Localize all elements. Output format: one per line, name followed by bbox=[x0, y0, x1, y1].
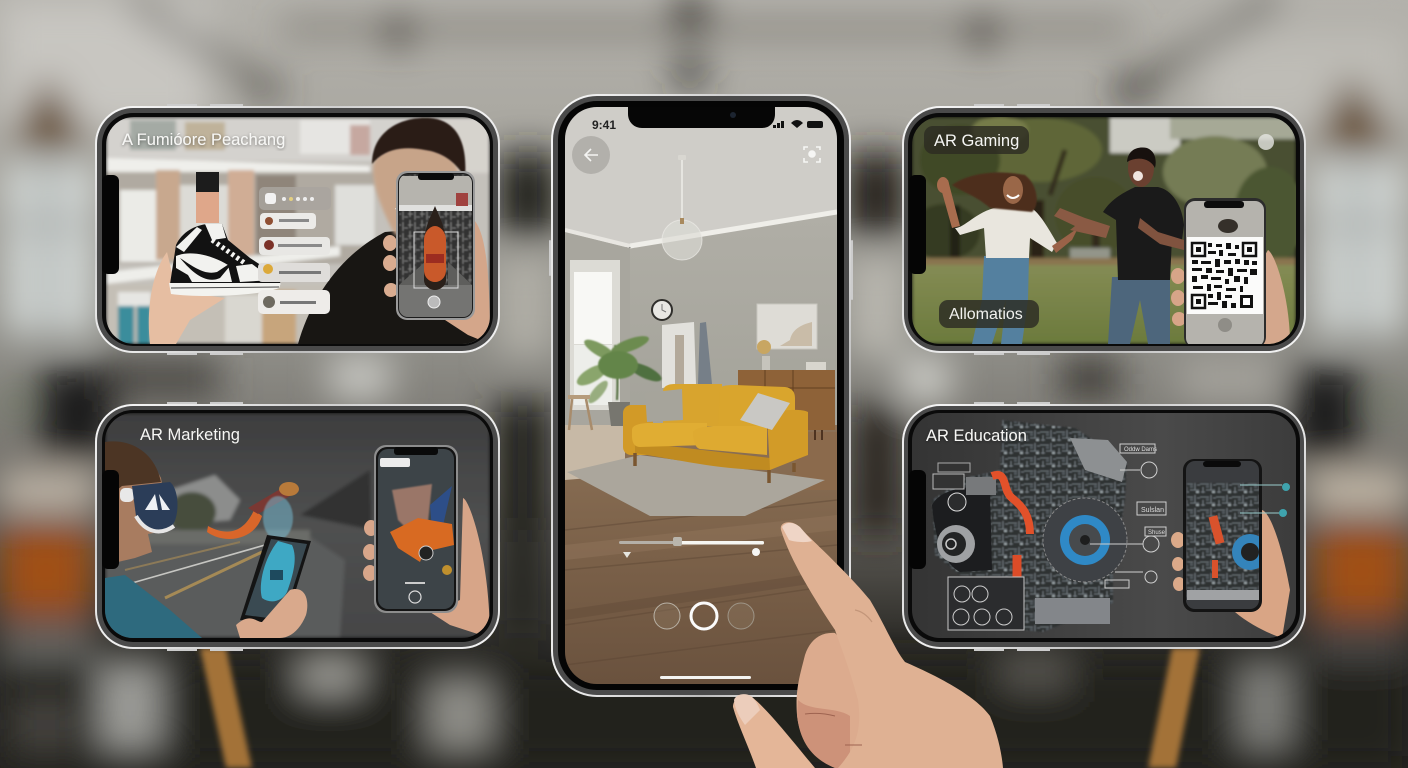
person holding phone bbox=[298, 118, 490, 344]
icon: pointing hand bbox=[733, 522, 1003, 768]
back button bbox=[572, 136, 610, 174]
callouts: engine part labels bbox=[1090, 444, 1166, 588]
wooden dresser bbox=[738, 340, 835, 440]
window bbox=[570, 260, 620, 410]
icon: hand holding small phone with engine bbox=[1171, 459, 1290, 638]
panel: AR education phone bbox=[902, 402, 1306, 651]
chart: engine exploded diagram bbox=[932, 420, 1127, 632]
yellow sofa bbox=[623, 384, 808, 483]
callouts: engine part labels: Sulslan bbox=[1141, 507, 1164, 514]
callouts: engine part labels: Oddw Dams bbox=[1124, 447, 1157, 453]
slate backdrop bbox=[912, 413, 1296, 638]
callouts: engine part labels: Shuse bbox=[1148, 530, 1166, 536]
person with headset bbox=[105, 441, 202, 638]
callout: product info cards bbox=[258, 187, 331, 314]
shop shelves backdrop bbox=[106, 117, 490, 344]
wall art bbox=[757, 304, 817, 349]
panel: product preview phone bbox=[95, 104, 500, 355]
icon: hand with QR code phone bbox=[1171, 198, 1290, 348]
panel: AR marketing phone bbox=[95, 402, 500, 651]
rug bbox=[567, 455, 825, 516]
capture buttons bbox=[654, 603, 754, 629]
heading: AR gaming bbox=[924, 126, 1029, 154]
status icons bbox=[773, 120, 823, 128]
AR slider control bbox=[619, 537, 764, 558]
label: game tag bbox=[939, 300, 1039, 328]
pendant lamp bbox=[662, 155, 702, 260]
potted plant bbox=[574, 333, 664, 406]
heading: AR education: AR Education bbox=[926, 427, 1027, 445]
icon: orange swoosh and splash bbox=[207, 482, 299, 540]
stormy road backdrop bbox=[105, 413, 490, 638]
label: game tag: Allomatios bbox=[949, 306, 1023, 323]
heading: AR marketing: AR Marketing bbox=[140, 426, 240, 444]
woman dancing bbox=[937, 172, 1078, 344]
park backdrop bbox=[910, 116, 1306, 344]
icon: tilted phone with bottle bbox=[236, 535, 311, 638]
heading: AR gaming: AR Gaming bbox=[934, 132, 1019, 150]
plant pot and stool bbox=[568, 395, 630, 430]
icon: hand holding small phone bbox=[383, 171, 490, 344]
hanging clothes bbox=[662, 322, 712, 388]
status time: 9:41 bbox=[592, 118, 616, 132]
icon: hand holding small phone with car bbox=[363, 445, 490, 638]
icon: AR scan frame bbox=[804, 147, 820, 162]
panel: central room-placement phone bbox=[549, 94, 853, 697]
icon: sneaker in hand bbox=[149, 172, 281, 344]
heading: product preview: A Fumióore Peachang bbox=[122, 131, 285, 149]
man laughing bbox=[1054, 148, 1184, 344]
living room scene bbox=[565, 107, 837, 684]
panel: AR gaming phone bbox=[902, 104, 1306, 355]
wall clock bbox=[652, 300, 672, 320]
chair legs bbox=[200, 648, 1200, 768]
home indicator bbox=[660, 676, 751, 679]
phone notch bbox=[628, 107, 775, 128]
